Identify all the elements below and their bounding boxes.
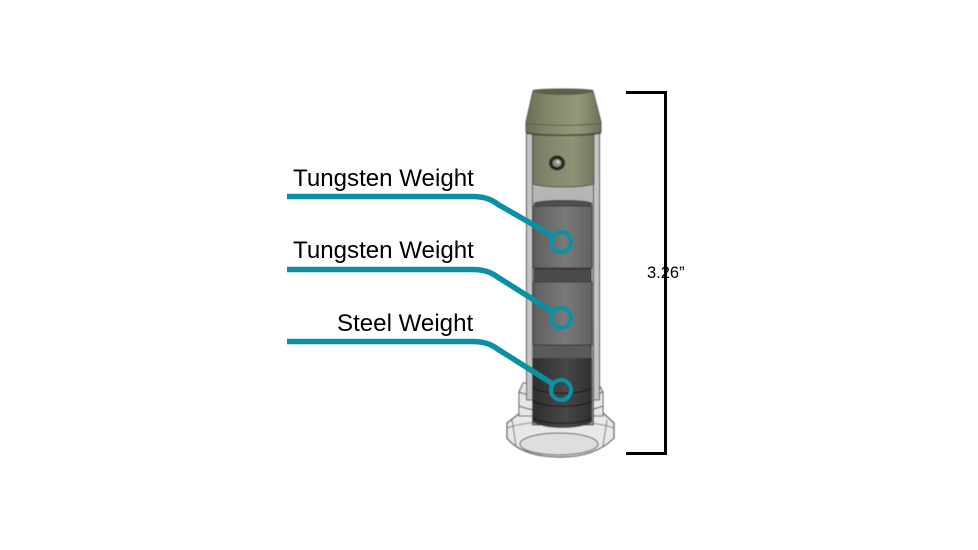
label: steel: Steel Weight xyxy=(337,310,473,337)
steel weight xyxy=(533,358,592,428)
callout: upper tungsten weight xyxy=(287,165,571,252)
olive inner body xyxy=(533,135,594,208)
leader line: steel xyxy=(287,342,553,384)
marker: steel xyxy=(551,380,571,400)
hex nut base xyxy=(507,413,614,457)
height bracket xyxy=(626,92,666,454)
tungsten spacer xyxy=(534,269,591,282)
olive cap xyxy=(526,88,601,135)
height label: 3.26” xyxy=(647,264,685,282)
marker: lower tungsten xyxy=(551,308,571,328)
leader line: lower tungsten xyxy=(287,270,553,312)
weight top lid xyxy=(534,200,592,208)
callout: lower tungsten weight xyxy=(287,237,571,328)
threaded collar xyxy=(519,383,603,416)
steel spacer xyxy=(534,345,591,359)
leader line: upper tungsten xyxy=(287,196,553,236)
outer tube xyxy=(526,130,600,400)
label: lower tungsten: Tungsten Weight xyxy=(293,237,474,264)
icon: weight cartridge cross-section xyxy=(507,88,614,457)
lower tungsten weight xyxy=(533,282,592,345)
screw xyxy=(549,156,565,170)
callout: steel weight xyxy=(287,310,571,400)
inner chamber xyxy=(532,135,594,425)
label: upper tungsten: Tungsten Weight xyxy=(293,165,474,192)
upper tungsten weight xyxy=(533,206,592,268)
marker: upper tungsten xyxy=(551,232,571,252)
